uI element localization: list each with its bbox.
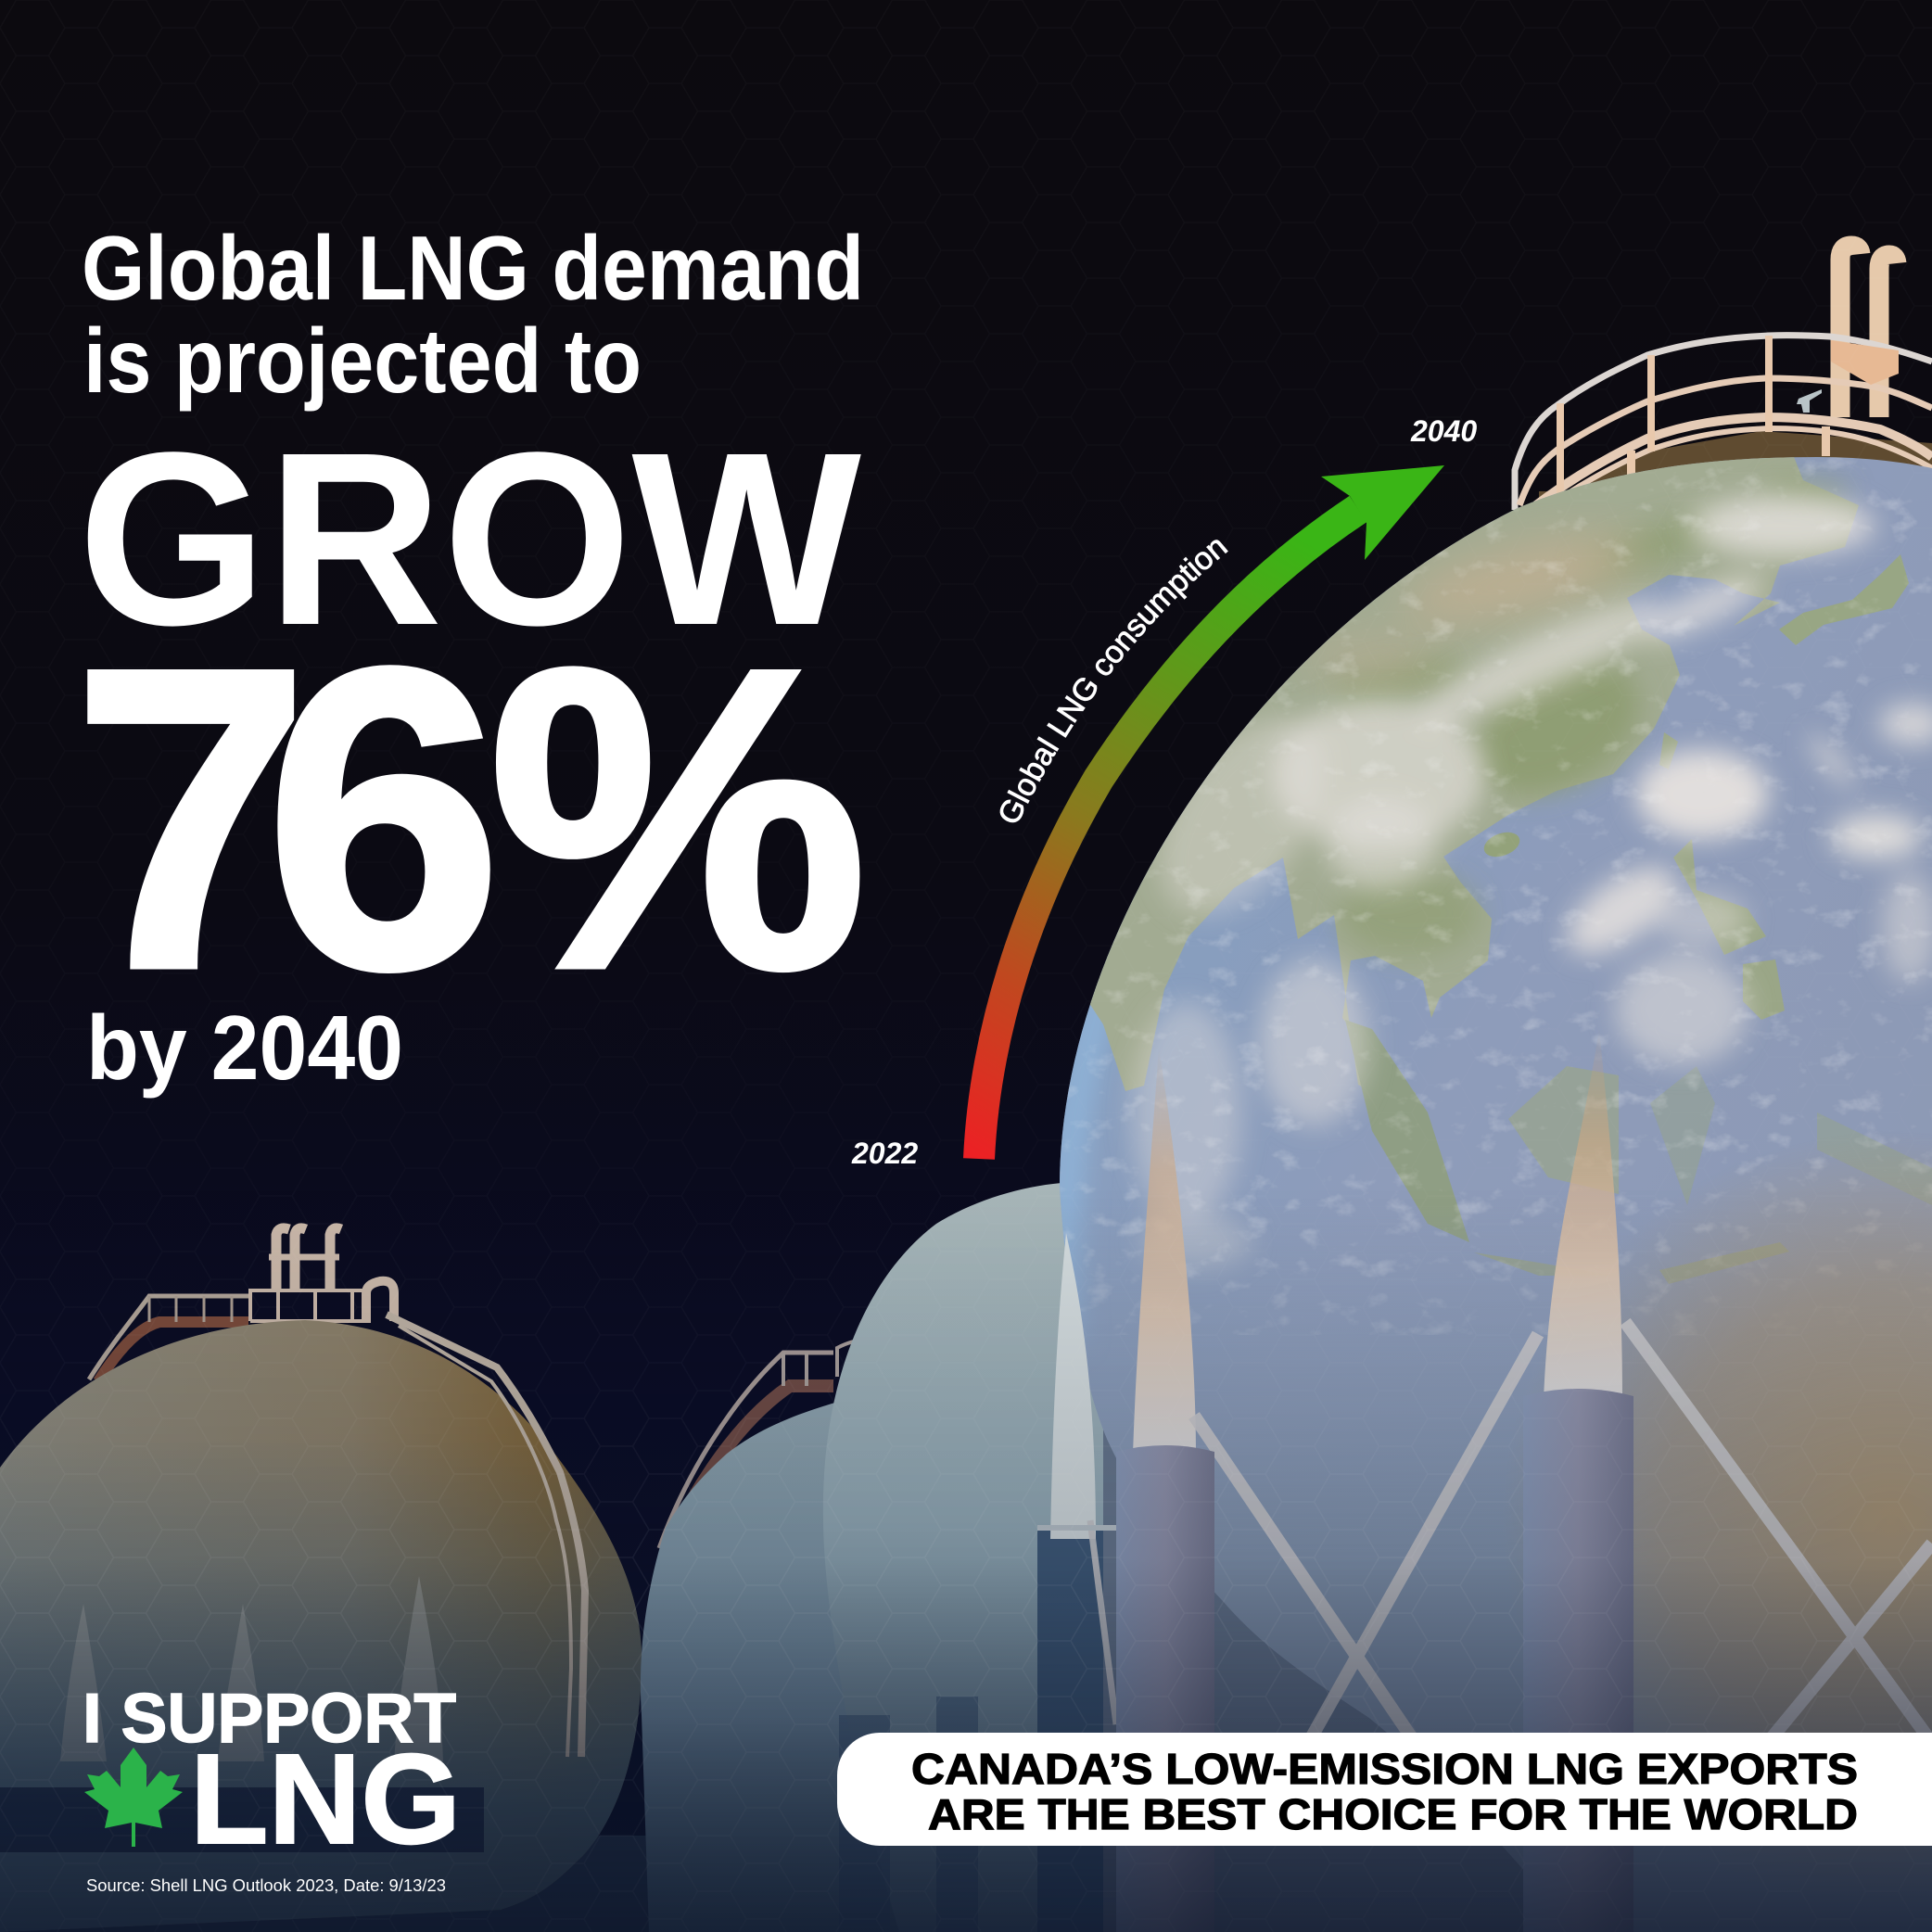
pipe collar plate [1831,340,1899,385]
bottom dark gradient overlay [0,1187,1932,1932]
logo: i support lng [83,1679,461,1871]
leg column right [1523,1389,1633,1932]
headline: is projected to: is projected to [83,310,642,412]
right leg cone [1544,1029,1622,1400]
structure behind lower part of the globe tank [1103,1391,1622,1932]
dark platform band beneath left tank [0,1787,484,1852]
arrow label: global lng consumption: Global LNG consumption [999,540,1228,823]
year label 2040: 2040 [1410,414,1477,448]
lower blue tank surface [1214,1272,1555,1717]
headline: global lng demand: Global LNG demand [82,217,864,319]
headline: by 2040: by 2040 [86,997,403,1099]
rails [1515,336,1932,513]
far left column top band [1037,1525,1116,1531]
ocean [1060,457,1932,1606]
small valve [1797,389,1822,413]
left tank body [0,1320,642,1932]
warm tan lit surface [1621,1160,1932,1733]
left tank leg lobes [60,1576,443,1761]
banner line two: ARE THE BEST CHOICE FOR THE WORLD [928,1790,1858,1838]
hexagon texture overlay [0,1405,1633,1832]
middle tank stairs [659,1340,869,1557]
year label 2022: 2022 [851,1137,918,1170]
third storage tank [823,1183,1205,1932]
big number: 76 percent: 76% [72,581,868,1057]
globe tank legs and braces [1037,1029,1932,1932]
icon: green maple leaf [84,1748,183,1847]
middle storage tank [641,1340,927,1932]
logo text lng: LNG [190,1728,461,1871]
sumatra [1345,1020,1469,1242]
atmosphere rim [1063,705,1242,1344]
borneo [1508,1066,1619,1194]
broad clouds [1125,496,1932,1270]
left storage tank [0,1228,642,1932]
deck underside [1539,431,1932,519]
dark blue support columns of the middle tanks [839,1529,1116,1932]
growth arrow from 2022 to 2040 [979,465,1444,1159]
java and lesser sunda islands [1474,1242,1789,1284]
left tank stair rail [89,1296,248,1381]
small cloud specks [1020,445,1932,1335]
leg column left [1116,1445,1214,1932]
left leg cone [1133,1048,1196,1455]
hainan [1483,833,1520,857]
vent pipes [1840,246,1897,417]
big word: grow: GROW [78,401,863,677]
green land tones [1328,480,1849,955]
japan [1779,554,1909,645]
arrow shaft [979,509,1358,1159]
banner line one: CANADA’S LOW-EMISSION LNG EXPORTS [911,1745,1858,1793]
globe tank: earth mapped onto the sphere [1020,445,1932,1932]
asia land mass [1090,457,1859,1094]
arrow head [1321,465,1444,560]
left tank top platform and pipes [248,1228,394,1321]
logo text i support: I SUPPORT [83,1679,456,1757]
bottom plant ground [0,1836,1932,1932]
left tank blue lower shading [0,1320,642,1932]
railing on top of globe tank [1515,246,1932,519]
tan desert tones [1307,520,1645,679]
far left leg cone [1050,1233,1096,1539]
left tank outer ladder rail [387,1315,585,1757]
cross braces [1090,1322,1932,1761]
callout banner [837,1733,1932,1846]
banner pill [837,1733,1932,1846]
philippines [1659,732,1785,1020]
source note: Source: Shell LNG Outlook 2023, Date: 9/13/23 [86,1876,446,1895]
middle tank body [641,1402,927,1932]
rail posts [1557,336,1830,496]
sulawesi and new guinea [1650,1066,1932,1205]
